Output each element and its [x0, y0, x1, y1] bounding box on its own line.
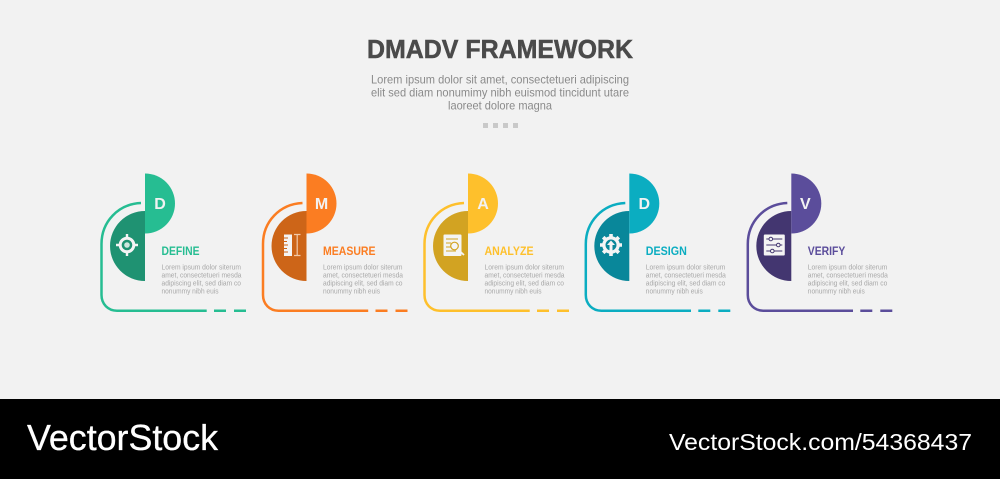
- outline frame: [424, 203, 569, 311]
- description: nonummy nibh euis: [162, 288, 219, 296]
- dark half circle: [756, 211, 791, 281]
- letter: M: [315, 196, 328, 213]
- description: amet, consectetueri mesda: [646, 272, 726, 280]
- description: [162, 264, 242, 296]
- letter: A: [477, 196, 489, 213]
- outline frame: [102, 203, 246, 311]
- description: Lorem ipsum dolor siterum: [323, 264, 403, 272]
- icon: gear with arrow: [600, 234, 622, 256]
- icon: target: [116, 234, 138, 256]
- dark half circle: [272, 211, 306, 281]
- description: nonummy nibh euis: [646, 288, 703, 296]
- description: adipiscing elit, sed diam co: [323, 280, 403, 288]
- heading: DEFINE: [162, 246, 200, 258]
- description: amet, consectetueri mesda: [323, 272, 403, 280]
- intro text: [371, 72, 629, 112]
- description: Lorem ipsum dolor siterum: [808, 264, 888, 272]
- intro text: elit sed diam nonumimy nibh euismod tincidunt utare: [371, 86, 629, 100]
- intro text: laoreet dolore magna: [448, 98, 552, 112]
- outline frame: [586, 203, 730, 311]
- outline frame: [748, 203, 892, 311]
- description: adipiscing elit, sed diam co: [646, 280, 725, 288]
- footer url: VectorStock.com/54368437: [669, 429, 972, 455]
- light half circle: [306, 174, 336, 234]
- description: adipiscing elit, sed diam co: [162, 280, 241, 288]
- separator dots: [483, 123, 518, 128]
- footer logo: VectorStock: [27, 417, 219, 458]
- icon: sliders: [764, 234, 785, 256]
- heading: MEASURE: [323, 246, 376, 258]
- letter: D: [639, 196, 650, 213]
- description: [323, 264, 403, 296]
- heading: DESIGN: [646, 246, 687, 258]
- dark half circle: [594, 211, 629, 281]
- intro text: Lorem ipsum dolor sit amet, consectetueri adipiscing: [371, 72, 629, 86]
- description: Lorem ipsum dolor siterum: [484, 264, 564, 272]
- description: [808, 264, 888, 296]
- light half circle: [145, 174, 175, 234]
- heading: VERIFY: [808, 246, 846, 258]
- dark half circle: [433, 211, 468, 281]
- description: nonummy nibh euis: [484, 288, 542, 296]
- light half circle: [791, 174, 821, 234]
- light half circle: [468, 174, 498, 234]
- light half circle: [629, 174, 659, 234]
- description: [484, 264, 565, 296]
- panel: define: [102, 174, 246, 311]
- letter: V: [800, 196, 811, 213]
- icon: ruler: [284, 234, 300, 256]
- letter: D: [154, 196, 166, 213]
- panel: measure: [263, 174, 408, 311]
- panel: analyze: [424, 174, 569, 311]
- description: amet, consectetueri mesda: [484, 272, 565, 280]
- description: [646, 264, 726, 296]
- description: adipiscing elit, sed diam co: [484, 280, 564, 288]
- icon: document with magnifier: [444, 234, 464, 256]
- outline frame: [263, 203, 408, 311]
- heading: ANALYZE: [484, 246, 534, 258]
- description: nonummy nibh euis: [808, 288, 865, 296]
- description: amet, consectetueri mesda: [808, 272, 888, 280]
- panel: design: [586, 174, 730, 311]
- description: amet, consectetueri mesda: [162, 272, 242, 280]
- footer band: [0, 399, 1000, 479]
- description: Lorem ipsum dolor siterum: [646, 264, 726, 272]
- description: Lorem ipsum dolor siterum: [162, 264, 241, 272]
- dark half circle: [110, 211, 145, 281]
- title: DMADV FRAMEWORK: [367, 34, 633, 64]
- description: adipiscing elit, sed diam co: [808, 280, 887, 288]
- description: nonummy nibh euis: [323, 288, 381, 296]
- panel: verify: [748, 174, 892, 311]
